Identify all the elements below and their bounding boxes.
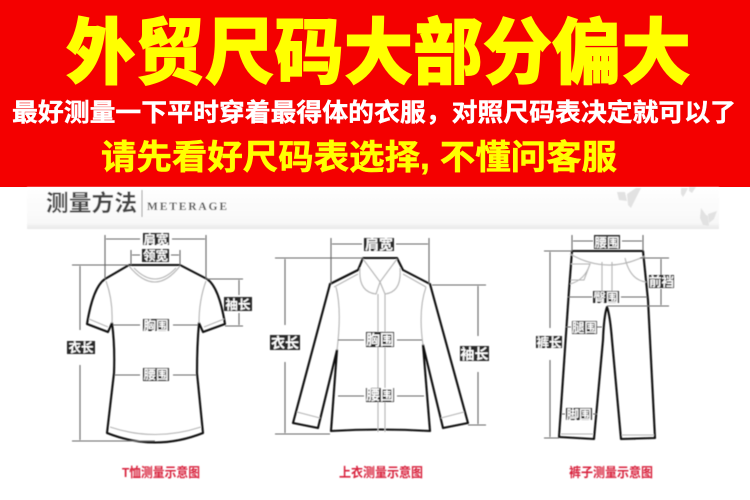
t-shirt diagram — [67, 232, 252, 480]
instruction line: 请先看好尺码表选择, 不懂问客服 — [101, 139, 617, 177]
label: sleeve length: 袖长 — [225, 297, 251, 312]
trousers outline — [559, 251, 655, 439]
label: waist: 腰围 — [594, 236, 620, 250]
label: hip: 臀围 — [593, 291, 619, 305]
t-shirt outline — [87, 265, 225, 442]
label: trouser length: 裤长 — [536, 335, 562, 350]
caption: trousers: 裤子测量示意图 — [569, 465, 653, 480]
label: chest: 胸围 — [366, 332, 394, 348]
label: garment length: 衣长 — [271, 335, 299, 351]
label: front rise: 前裆 — [649, 274, 674, 289]
butterflies — [617, 187, 717, 226]
advice line: 最好测量一下平时穿着最得体的衣服，对照尺码表决定就可以了 — [12, 99, 736, 127]
label: thigh: 腿围 — [572, 321, 597, 335]
section heading: 测量方法 — [46, 190, 137, 216]
shirt diagram — [270, 236, 489, 480]
caption: t-shirt: T恤测量示意图 — [122, 465, 200, 480]
banner — [0, 0, 750, 187]
header divider — [142, 190, 143, 217]
t-shirt measure lines — [72, 235, 243, 441]
english subheading: METERAGE — [147, 201, 227, 213]
label: sleeve length: 袖长 — [460, 346, 488, 362]
label: ankle: 脚围 — [566, 408, 592, 422]
label: collar width: 领宽 — [143, 248, 168, 263]
trousers measure lines — [544, 235, 669, 438]
label: chest: 胸围 — [143, 318, 169, 333]
t-shirt details — [89, 266, 224, 434]
label: garment length: 衣长 — [68, 340, 94, 355]
label: waist: 腰围 — [366, 387, 394, 403]
shirt measure lines — [275, 238, 486, 434]
header gradient — [27, 187, 719, 229]
shirt details — [297, 259, 464, 432]
label: shoulder width: 肩宽 — [365, 236, 393, 252]
caption: shirt: 上衣测量示意图 — [339, 465, 423, 480]
label: waist: 腰围 — [143, 368, 169, 382]
trousers details — [561, 254, 654, 435]
label: shoulder width: 肩宽 — [143, 232, 169, 247]
banner background — [0, 0, 750, 187]
main title: 外贸尺码大部分偏大 — [66, 14, 691, 94]
section header strip — [27, 187, 719, 229]
trousers diagram — [536, 235, 674, 480]
shirt outline — [293, 258, 468, 431]
